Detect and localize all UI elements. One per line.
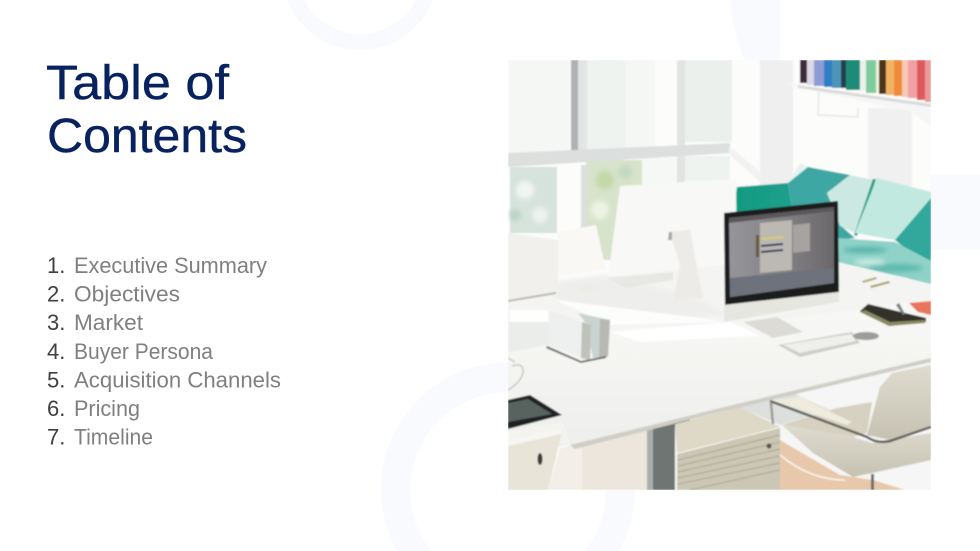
back desk — [508, 262, 931, 352]
item 3: 3. — [47, 310, 65, 335]
tablet — [508, 395, 562, 429]
item 6: Pricing — [74, 396, 140, 421]
pedestal and table leg — [582, 418, 690, 490]
office photo — [508, 60, 931, 490]
under desk wall and floor — [548, 394, 905, 490]
background decorative rings — [287, 0, 980, 551]
white chair at window — [581, 224, 604, 260]
window frames — [571, 60, 578, 153]
laptop stand — [546, 310, 610, 363]
left chair — [508, 434, 562, 490]
brick columns — [760, 60, 912, 186]
beige chair — [770, 365, 931, 490]
item 4: Buyer Persona — [74, 339, 214, 364]
item 5: 5. — [47, 367, 65, 392]
teal sofa — [733, 163, 931, 286]
item 2: 2. — [47, 282, 65, 307]
main desk — [508, 322, 930, 446]
white laptop panel — [508, 233, 558, 301]
title: Table of — [46, 57, 230, 110]
item 1: 1. — [47, 253, 65, 278]
item 4: 4. — [47, 339, 65, 364]
rear monitor — [610, 182, 738, 298]
item 6: 6. — [47, 396, 65, 421]
title: Contents — [47, 110, 247, 163]
cup — [508, 358, 523, 390]
item 7: Timeline — [74, 425, 153, 450]
item 1: Executive Summary — [74, 253, 267, 278]
item 2: Objectives — [74, 282, 180, 307]
table of contents list — [47, 253, 281, 450]
desk front edge — [570, 358, 931, 449]
item 3: Market — [74, 310, 143, 335]
notebook, pens and red folder — [860, 277, 931, 326]
item 5: Acquisition Channels — [74, 367, 281, 392]
bookshelf — [797, 60, 931, 118]
cabinet — [675, 407, 780, 490]
item 7: 7. — [47, 425, 65, 450]
keyboard and mouse — [778, 332, 879, 357]
window panes — [508, 60, 760, 260]
front monitor — [724, 201, 839, 338]
